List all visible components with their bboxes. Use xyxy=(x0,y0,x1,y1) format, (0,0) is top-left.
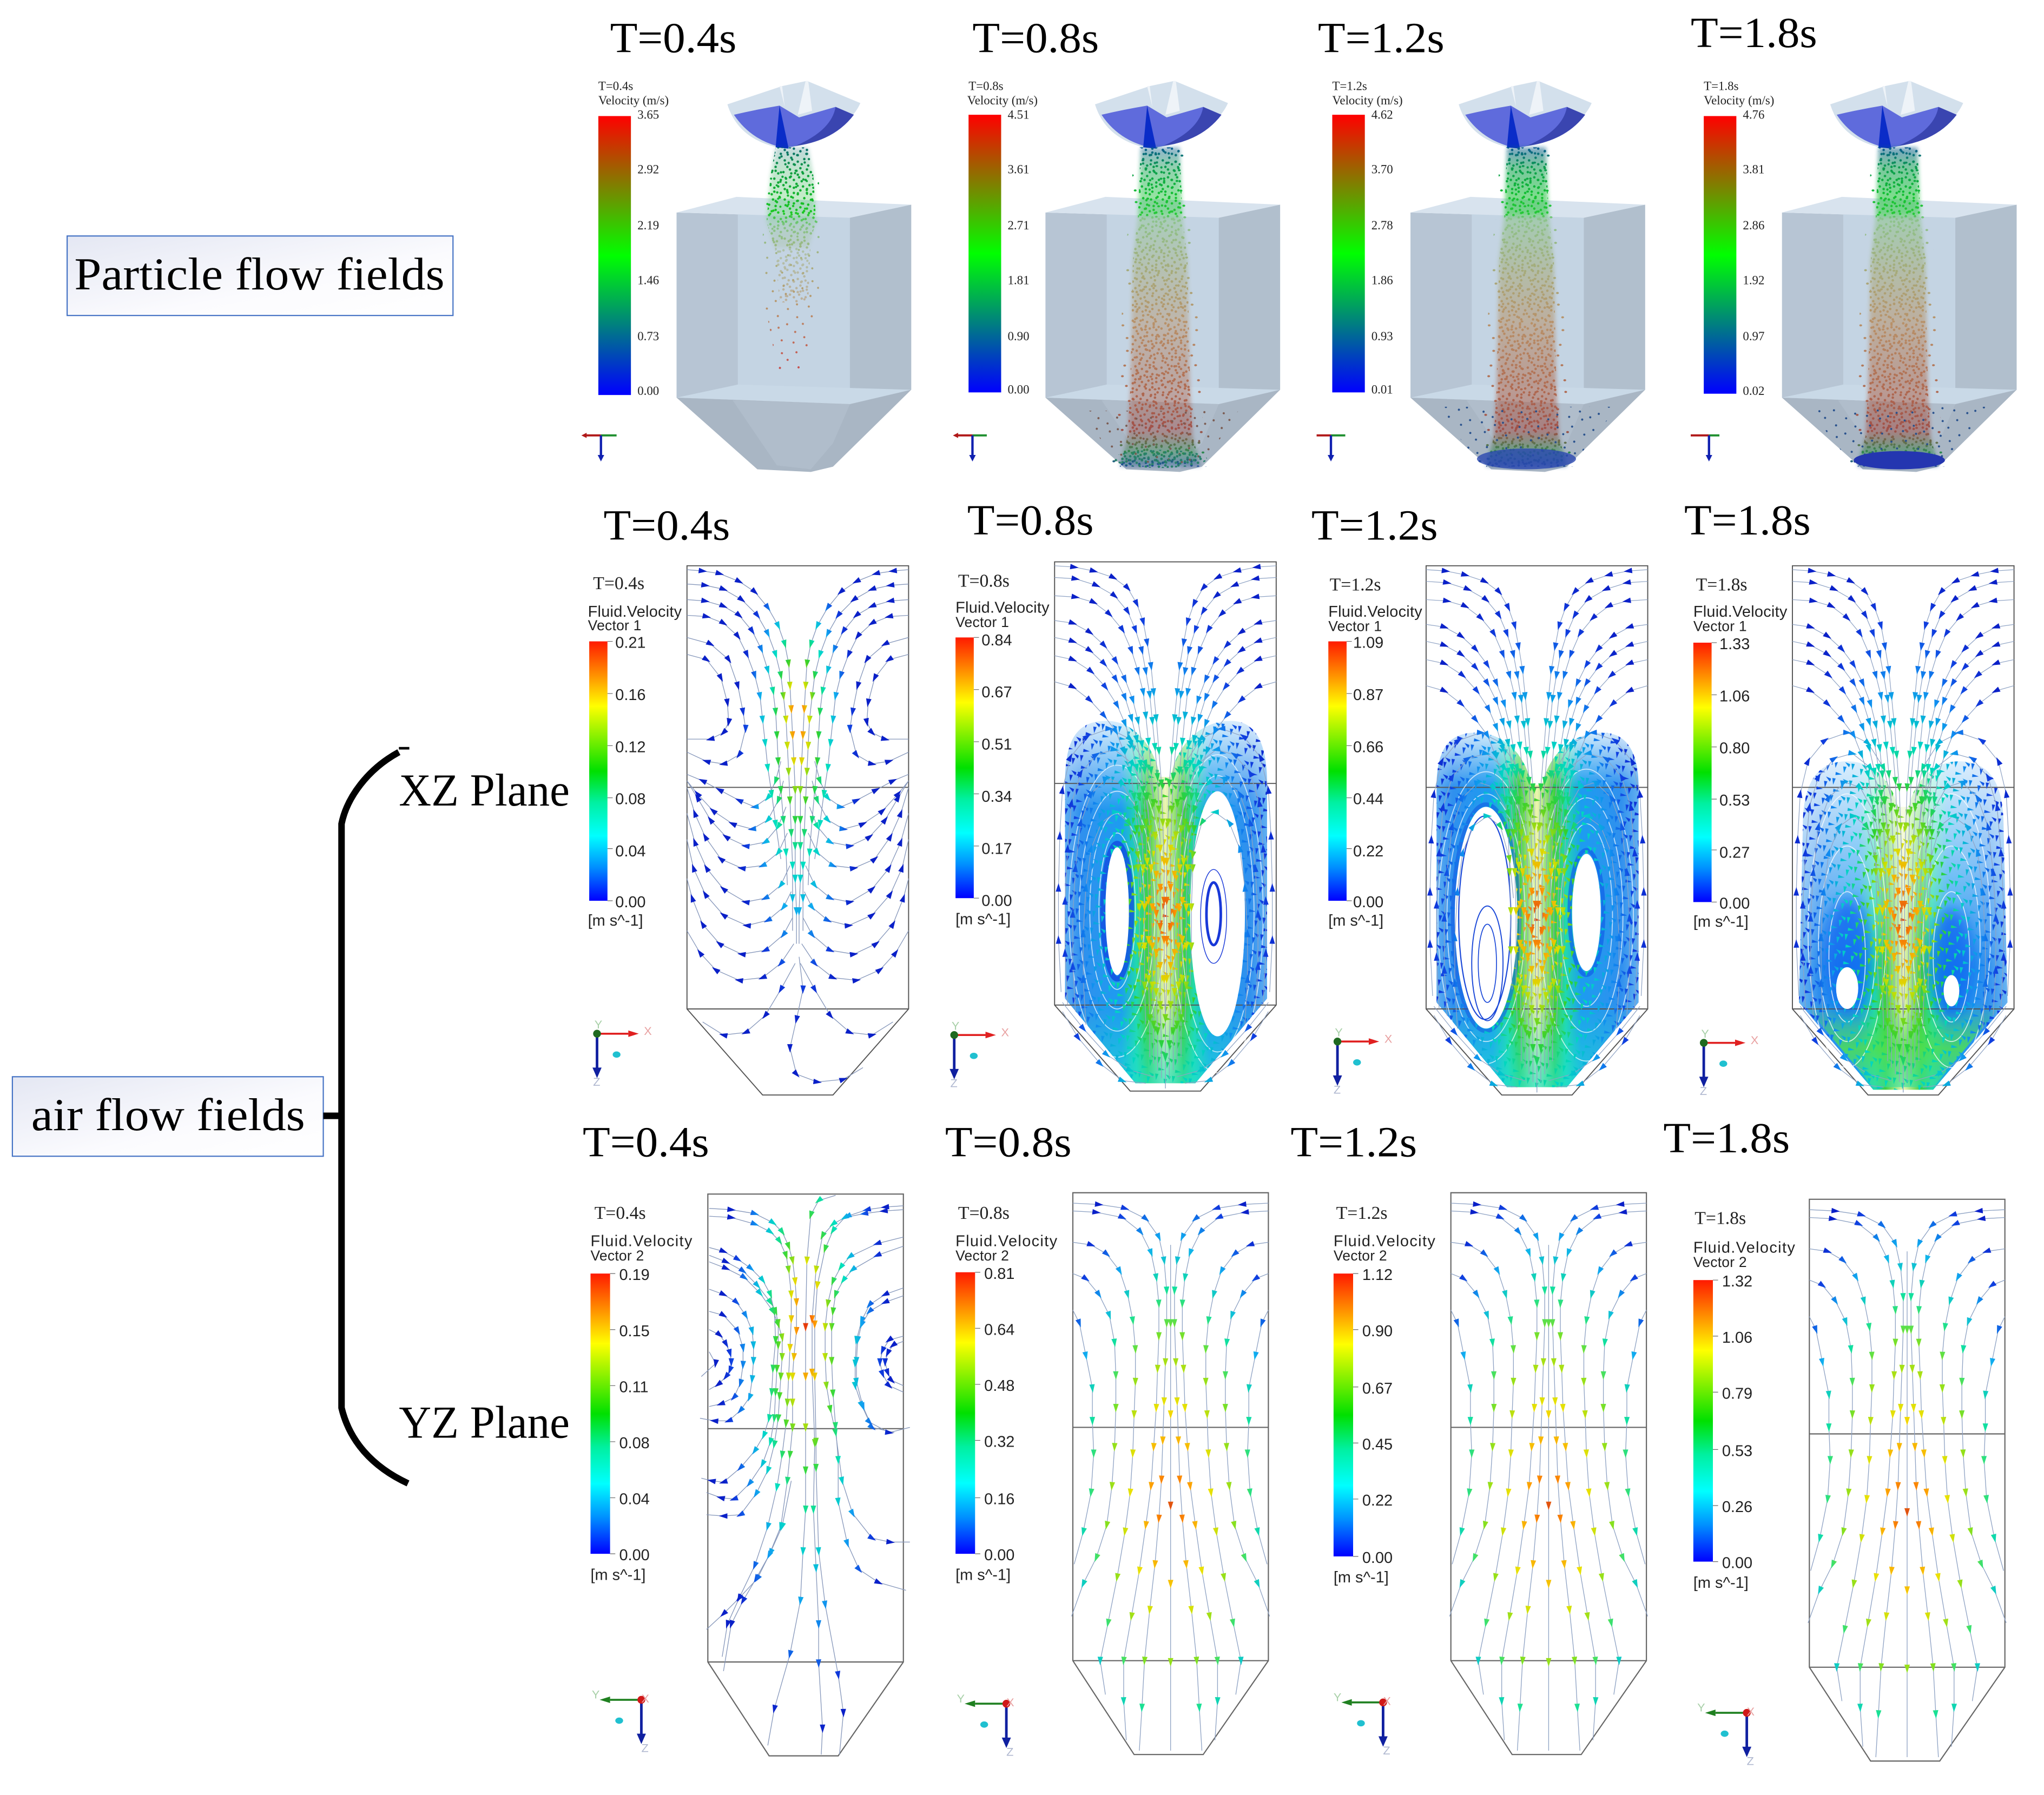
legend: YZ T=1.2s: [m s^-1] xyxy=(1334,1569,1389,1586)
panel: particle field T=0.4s: 3.65 xyxy=(637,108,659,121)
heading row: YZ time labels: T=0.4s xyxy=(583,1118,709,1166)
axis triad: XZ T=1.2s: Y xyxy=(1335,1026,1343,1039)
axis triad: YZ T=0.4s: X xyxy=(641,1692,649,1705)
legend: XZ T=1.2s: 0.22 xyxy=(1353,843,1383,860)
box: Particle flow fields xyxy=(67,236,453,315)
legend: YZ T=0.8s: 0.32 xyxy=(984,1434,1014,1451)
panel: particle field T=0.8s: T=0.8s xyxy=(972,14,1099,62)
legend: XZ T=1.2s: 0.66 xyxy=(1353,738,1383,756)
panel: particle field T=1.8s: 1.92 xyxy=(1743,273,1764,287)
panel: particle field T=1.8s xyxy=(1691,9,2016,472)
heading row: YZ time labels: T=0.8s xyxy=(945,1118,1072,1166)
legend: XZ T=0.4s: 0.00 xyxy=(615,894,646,911)
legend: XZ T=1.2s: 0.00 xyxy=(1353,894,1383,911)
heading row: YZ time labels xyxy=(583,1114,1790,1166)
legend: YZ T=1.2s: 0.67 xyxy=(1362,1380,1393,1397)
legend: XZ T=0.4s: 0.16 xyxy=(615,687,646,704)
legend: YZ T=0.4s: [m s^-1] xyxy=(590,1566,645,1583)
inner vortex left xyxy=(1459,816,1511,1021)
label: XZ Plane: XZ Plane xyxy=(399,765,570,816)
legend: XZ T=1.8s: 0.00 xyxy=(1719,895,1750,912)
legend: YZ T=0.4s: 0.19 xyxy=(619,1266,650,1284)
heading row: XZ time labels xyxy=(604,497,1811,550)
box: air flow fields: air flow fields xyxy=(31,1090,305,1140)
axis triad: XZ T=0.4s xyxy=(592,1018,652,1088)
panel: XZ streamlines T=0.8s xyxy=(1028,536,1315,1136)
panel: particle field T=1.8s: 0.02 xyxy=(1743,384,1764,398)
panel: particle field T=0.8s xyxy=(953,14,1280,472)
panel: particle field T=0.8s: 0.90 xyxy=(1007,329,1030,343)
legend: XZ T=0.8s: 0.00 xyxy=(981,893,1012,910)
axis triad: YZ T=0.4s xyxy=(592,1688,649,1754)
legend: XZ T=1.8s: 0.53 xyxy=(1719,792,1750,809)
legend: YZ T=0.8s: Vector 2 xyxy=(955,1248,1009,1264)
legend: XZ T=0.8s: 0.67 xyxy=(981,684,1012,701)
axis triad: XZ T=1.8s: X xyxy=(1751,1033,1758,1047)
legend: YZ T=1.8s: 1.06 xyxy=(1722,1329,1752,1347)
axis triad: YZ T=1.2s xyxy=(1334,1690,1391,1757)
heading row: YZ time labels: T=1.8s xyxy=(1663,1114,1790,1162)
box: air flow fields xyxy=(12,1077,324,1156)
panel: XZ streamlines T=0.4s xyxy=(661,540,948,1139)
panel: particle field T=1.2s: 3.70 xyxy=(1372,163,1393,176)
axis triad: YZ T=0.4s: Y xyxy=(592,1688,599,1701)
legend: YZ T=0.4s: 0.11 xyxy=(619,1378,649,1396)
legend: XZ T=1.8s: 1.33 xyxy=(1719,636,1750,653)
axis triad: YZ T=1.8s: X xyxy=(1747,1705,1755,1718)
heading row: XZ time labels: T=1.8s xyxy=(1684,497,1811,544)
legend: YZ T=1.2s: T=1.2s xyxy=(1336,1203,1388,1223)
legend: YZ T=0.8s: 0.00 xyxy=(984,1547,1014,1564)
panel: particle field T=1.2s: 2.78 xyxy=(1372,219,1393,232)
legend: XZ T=0.4s: 0.08 xyxy=(615,791,646,808)
axis triad: XZ T=1.8s: Z xyxy=(1700,1084,1707,1098)
legend: YZ T=0.8s: 0.64 xyxy=(984,1321,1014,1338)
axis triad: YZ T=0.8s: Z xyxy=(1006,1745,1013,1759)
legend: YZ T=0.4s: 0.00 xyxy=(619,1547,650,1564)
legend: XZ T=0.8s: [m s^-1] xyxy=(955,910,1011,928)
axis triad: YZ T=0.8s: X xyxy=(1006,1695,1014,1709)
legend: YZ T=0.8s: Fluid.Velocity xyxy=(955,1233,1058,1250)
legend: YZ T=0.4s: 0.08 xyxy=(619,1435,650,1452)
panel: particle field T=0.8s: 1.81 xyxy=(1007,273,1030,287)
legend: YZ T=0.4s xyxy=(590,1203,693,1583)
legend: XZ T=1.2s: 1.09 xyxy=(1353,635,1383,652)
heading row: YZ time labels: T=1.2s xyxy=(1290,1118,1417,1166)
panel: particle field T=0.4s xyxy=(582,14,911,472)
legend: XZ T=1.8s: Vector 1 xyxy=(1693,618,1747,634)
legend: YZ T=0.4s: 0.15 xyxy=(619,1323,650,1340)
axis triad: XZ T=1.8s xyxy=(1699,1027,1758,1098)
panel: particle field T=0.4s: T=0.4s xyxy=(598,79,633,93)
panel: particle field T=1.2s xyxy=(1317,14,1645,472)
heading row: XZ time labels: T=0.4s xyxy=(604,502,730,550)
legend: YZ T=1.2s: 0.00 xyxy=(1362,1549,1393,1567)
legend: YZ T=0.8s: 0.16 xyxy=(984,1491,1014,1508)
panel: particle field T=0.8s: 3.61 xyxy=(1007,163,1030,176)
axis triad: YZ T=1.2s: Y xyxy=(1334,1690,1341,1704)
legend: XZ T=0.4s: T=0.4s xyxy=(593,573,644,593)
vortex core halos xyxy=(1824,898,1974,1018)
legend: XZ T=1.8s: 0.80 xyxy=(1719,740,1750,757)
axis triad: XZ T=1.8s: Y xyxy=(1701,1027,1709,1040)
axis triad: YZ T=1.8s xyxy=(1697,1701,1755,1767)
panel: particle field T=1.8s: 2.86 xyxy=(1743,219,1764,232)
legend: XZ T=1.2s: T=1.2s xyxy=(1330,575,1381,595)
vortex band fill xyxy=(1436,732,1639,1087)
heading row: XZ time labels: T=0.8s xyxy=(967,497,1094,544)
legend: YZ T=1.2s: 0.90 xyxy=(1362,1323,1393,1340)
panel: particle field T=0.8s: 2.71 xyxy=(1007,219,1030,232)
panel: particle field T=1.8s: 4.76 xyxy=(1743,108,1764,121)
axis triad: YZ T=1.8s: Y xyxy=(1697,1701,1705,1714)
panel: YZ streamlines T=0.4s xyxy=(682,1168,942,1793)
legend: YZ T=0.4s: 0.04 xyxy=(619,1491,650,1508)
legend: YZ T=1.2s: Fluid.Velocity xyxy=(1334,1233,1435,1250)
panel: particle field T=0.4s: 2.19 xyxy=(637,219,659,232)
panel: particle field T=1.8s: T=1.8s xyxy=(1704,79,1739,93)
legend: XZ T=0.4s xyxy=(588,573,682,929)
legend: YZ T=1.2s xyxy=(1334,1203,1435,1586)
legend: YZ T=1.8s: T=1.8s xyxy=(1694,1209,1746,1229)
axis triad: XZ T=1.2s: X xyxy=(1384,1032,1392,1046)
panel: particle field T=1.2s: 1.86 xyxy=(1372,273,1393,287)
label: YZ Plane: YZ Plane xyxy=(399,1398,570,1448)
panel: particle field T=0.4s: Velocity (m/s) xyxy=(598,94,669,107)
axis triad: YZ T=0.4s: Z xyxy=(641,1741,649,1754)
axis triad: XZ T=0.8s: Y xyxy=(952,1019,959,1033)
panel: particle field T=0.4s: 0.73 xyxy=(637,329,659,343)
legend: XZ T=0.4s: [m s^-1] xyxy=(588,912,643,929)
panel: XZ streamlines T=1.2s xyxy=(1400,540,1687,1139)
axis triad: YZ T=0.8s xyxy=(957,1692,1014,1759)
legend: YZ T=1.8s: Vector 2 xyxy=(1693,1254,1747,1270)
legend: XZ T=1.2s: [m s^-1] xyxy=(1328,912,1383,929)
panel: particle field T=1.2s: Velocity (m/s) xyxy=(1332,94,1403,107)
panel: particle field T=1.8s: 0.97 xyxy=(1743,329,1764,343)
axis triad: XZ T=0.8s xyxy=(950,1019,1009,1090)
legend: YZ T=1.2s: Vector 2 xyxy=(1334,1248,1387,1264)
axis triad: XZ T=1.2s: Z xyxy=(1334,1083,1341,1097)
bracket connecting air flow fields to planes xyxy=(324,748,410,1483)
inner vortex right xyxy=(1201,869,1227,964)
panel: particle field T=0.8s: 0.00 xyxy=(1007,383,1030,397)
panel: particle field T=1.8s: 3.81 xyxy=(1743,163,1764,176)
legend: XZ T=0.8s: Fluid.Velocity xyxy=(955,599,1050,617)
legend: YZ T=1.2s: 1.12 xyxy=(1362,1266,1393,1284)
legend: XZ T=1.2s: 0.87 xyxy=(1353,687,1383,704)
legend: XZ T=1.8s xyxy=(1693,575,1788,931)
axis triad: YZ T=1.2s: X xyxy=(1383,1694,1391,1708)
legend: XZ T=0.4s: 0.04 xyxy=(615,843,646,860)
legend: YZ T=1.8s: 0.00 xyxy=(1722,1555,1752,1572)
legend: XZ T=0.8s: 0.17 xyxy=(981,840,1012,857)
legend: XZ T=0.8s: 0.51 xyxy=(981,736,1012,754)
panel: particle field T=1.2s: 0.93 xyxy=(1372,329,1393,343)
panel: particle field T=1.8s: Velocity (m/s) xyxy=(1704,94,1774,107)
legend: YZ T=0.8s xyxy=(955,1203,1058,1583)
legend: YZ T=0.4s: Fluid.Velocity xyxy=(590,1233,693,1250)
panel: particle field T=0.8s: Velocity (m/s) xyxy=(967,94,1038,107)
panel: YZ streamlines T=1.8s xyxy=(1783,1173,2044,1795)
axis triad: XZ T=1.2s xyxy=(1333,1026,1392,1097)
panel: particle field T=0.4s: 2.92 xyxy=(637,163,659,176)
legend: XZ T=1.8s: 0.27 xyxy=(1719,844,1750,862)
legend: YZ T=0.8s: 0.81 xyxy=(984,1265,1014,1283)
legend: YZ T=1.8s: 0.26 xyxy=(1722,1499,1752,1516)
heading row: XZ time labels: T=1.2s xyxy=(1311,502,1438,550)
panel: particle field T=1.2s: 0.01 xyxy=(1372,383,1393,397)
panel: particle field T=1.8s: T=1.8s xyxy=(1691,9,1817,57)
panel: particle field T=0.4s: 0.00 xyxy=(637,384,659,398)
panel: XZ streamlines T=1.8s xyxy=(1766,540,2044,1139)
panel: YZ streamlines T=0.8s xyxy=(1047,1167,1308,1792)
legend: YZ T=1.8s: 0.79 xyxy=(1722,1385,1752,1402)
legend: YZ T=1.8s: 0.53 xyxy=(1722,1442,1752,1460)
panel: particle field T=0.4s: 1.46 xyxy=(637,273,659,287)
box: Particle flow fields: Particle flow fields xyxy=(74,249,445,300)
legend: YZ T=1.8s: Fluid.Velocity xyxy=(1693,1239,1795,1257)
legend: XZ T=1.2s: Fluid.Velocity xyxy=(1328,603,1422,621)
legend: XZ T=0.8s xyxy=(955,571,1050,928)
legend: XZ T=1.2s: 0.44 xyxy=(1353,791,1383,808)
legend: YZ T=1.8s xyxy=(1693,1209,1795,1592)
legend: XZ T=1.8s: 1.06 xyxy=(1719,688,1750,705)
legend: XZ T=0.4s: 0.12 xyxy=(615,738,646,756)
legend: YZ T=0.4s: T=0.4s xyxy=(595,1203,646,1223)
axis triad: YZ T=0.8s: Y xyxy=(957,1692,965,1705)
legend: YZ T=1.2s: 0.22 xyxy=(1362,1492,1393,1509)
legend: XZ T=0.4s: 0.21 xyxy=(615,635,646,652)
panel: YZ streamlines T=1.2s xyxy=(1425,1167,1685,1792)
legend: XZ T=0.8s: 0.84 xyxy=(981,632,1012,649)
panel: particle field T=1.2s: T=1.2s xyxy=(1332,79,1367,93)
axis triad: XZ T=0.4s: X xyxy=(644,1024,652,1038)
panel: particle field T=0.8s: 4.51 xyxy=(1007,108,1030,121)
legend: XZ T=0.8s: T=0.8s xyxy=(958,571,1010,591)
vortex band fill xyxy=(1799,761,2008,1090)
panel: particle field T=1.2s: T=1.2s xyxy=(1318,14,1445,62)
legend: YZ T=0.8s: T=0.8s xyxy=(958,1203,1010,1223)
axis triad: XZ T=0.8s: Z xyxy=(950,1077,958,1090)
legend: XZ T=0.4s: Vector 1 xyxy=(588,617,641,633)
axis triad: YZ T=1.2s: Z xyxy=(1383,1744,1390,1757)
panel: particle field T=0.4s: T=0.4s xyxy=(610,14,736,62)
legend: XZ T=0.4s: Fluid.Velocity xyxy=(588,603,682,621)
legend: YZ T=1.8s: 1.32 xyxy=(1722,1273,1752,1290)
panel: particle field T=1.2s: 4.62 xyxy=(1372,108,1393,121)
vortex band fill xyxy=(1065,721,1267,1083)
axis triad: XZ T=0.8s: X xyxy=(1001,1026,1009,1039)
legend: XZ T=0.8s: 0.34 xyxy=(981,788,1012,806)
panel: particle field T=0.8s: T=0.8s xyxy=(968,79,1004,93)
legend: XZ T=1.2s: Vector 1 xyxy=(1328,618,1382,634)
legend: YZ T=0.4s: Vector 2 xyxy=(590,1248,644,1264)
legend: XZ T=1.8s: Fluid.Velocity xyxy=(1693,603,1788,621)
axis triad: YZ T=1.8s: Z xyxy=(1747,1754,1754,1767)
legend: XZ T=1.8s: T=1.8s xyxy=(1696,575,1748,595)
legend: YZ T=1.8s: [m s^-1] xyxy=(1693,1574,1749,1592)
legend: XZ T=0.8s: Vector 1 xyxy=(955,614,1009,630)
legend: XZ T=1.8s: [m s^-1] xyxy=(1693,913,1749,931)
axis triad: XZ T=0.4s: Z xyxy=(593,1075,601,1088)
legend: YZ T=1.2s: 0.45 xyxy=(1362,1436,1393,1453)
legend: YZ T=0.8s: 0.48 xyxy=(984,1377,1014,1395)
axis triad: XZ T=0.4s: Y xyxy=(595,1018,602,1031)
legend: YZ T=0.8s: [m s^-1] xyxy=(955,1566,1011,1583)
legend: XZ T=1.2s xyxy=(1328,575,1422,929)
